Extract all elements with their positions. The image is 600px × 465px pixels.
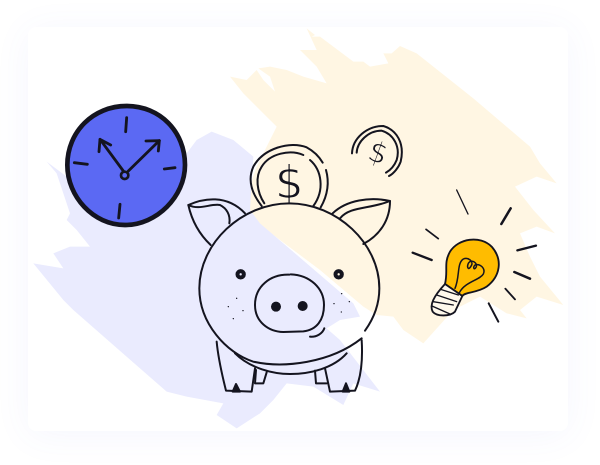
nostrils [271,301,308,312]
freckles [228,293,350,319]
brush stroke: pale blue [33,132,380,428]
brush stroke: pale yellow [220,28,563,343]
belly [235,353,347,374]
base threads [432,289,458,314]
clock hands [99,139,159,179]
smile [310,328,324,337]
legs [217,340,362,392]
light rays [413,190,536,322]
bulb glass [445,240,499,296]
ears [188,199,390,245]
coin in slot: $ [275,156,304,209]
panel: white card [28,27,568,431]
eyes [237,271,342,277]
coin in slot [251,145,328,209]
floating coin: $ [364,134,393,172]
floating coin [352,126,402,176]
filament [455,258,484,293]
snout [255,274,324,332]
light bulb [413,190,536,322]
clock [67,106,185,225]
hour ticks [74,118,175,218]
body [199,203,379,364]
piggy bank [188,126,402,392]
clock face [67,106,185,225]
bulb base [432,284,462,315]
